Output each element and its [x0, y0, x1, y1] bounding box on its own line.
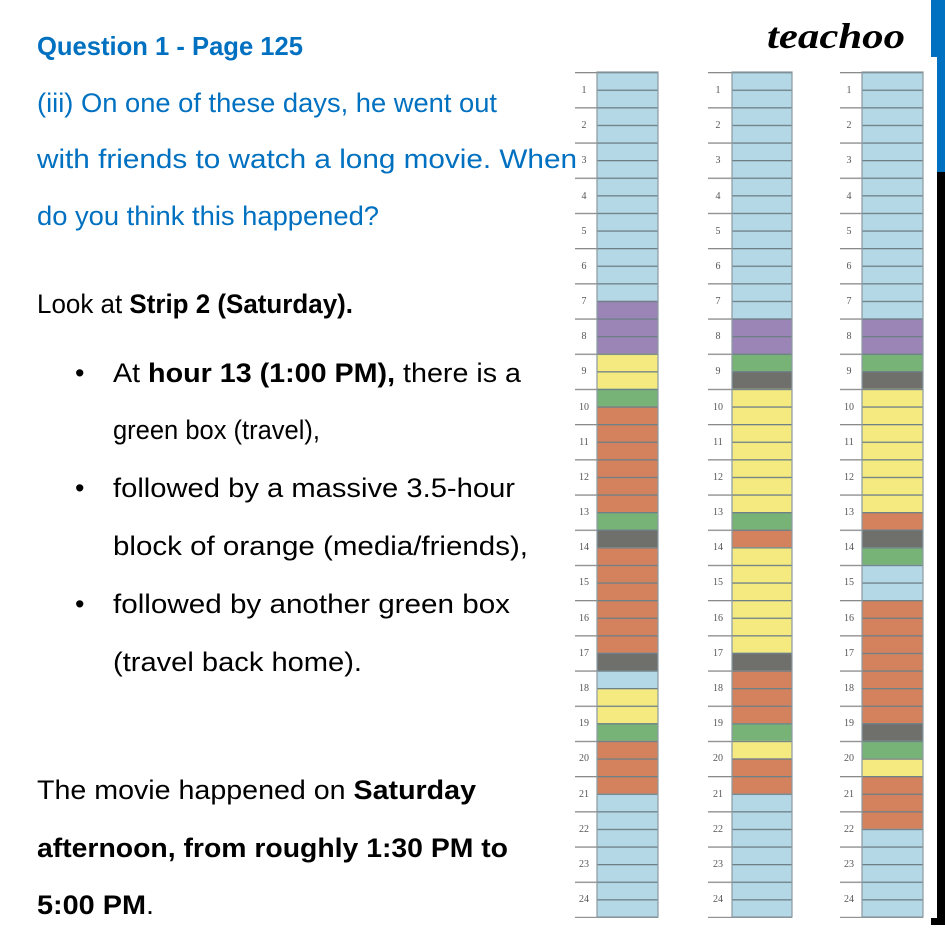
- bullet list: followed by another green box: [113, 589, 511, 619]
- hour labels: 2: [582, 120, 586, 131]
- hour labels: 24: [844, 894, 854, 905]
- hour labels: 13: [579, 507, 589, 518]
- hour labels: 13: [844, 507, 854, 518]
- bullet list: (travel back home).: [113, 647, 362, 677]
- hour labels: 7: [846, 296, 852, 307]
- question text: [36, 88, 577, 231]
- hour labels: 16: [713, 613, 723, 624]
- answer text: Look at Strip 2 (Saturday).: [37, 289, 353, 319]
- strip 1 (Friday): [575, 72, 658, 918]
- hour labels: 5: [582, 226, 586, 237]
- hour labels: 4: [582, 191, 586, 202]
- hour labels: 5: [846, 226, 852, 237]
- strip 3 (Sunday): [840, 72, 923, 918]
- hour labels: 12: [713, 472, 723, 483]
- hour labels: 3: [716, 155, 720, 166]
- hour labels: 23: [844, 859, 854, 870]
- hour labels: 7: [582, 296, 586, 307]
- hour labels: 10: [844, 402, 854, 413]
- hour labels: 22: [844, 824, 854, 835]
- hour labels: 1: [582, 85, 586, 96]
- answer text: The movie happened on Saturday: [37, 775, 476, 805]
- hour labels: 1: [846, 85, 852, 96]
- hour labels: 18: [579, 683, 589, 694]
- bullet list: followed by a massive 3.5-hour: [113, 473, 515, 503]
- strip 2 (Saturday): [708, 72, 792, 918]
- answer text: 5:00 PM .: [37, 890, 154, 920]
- hour labels: 4: [716, 191, 720, 202]
- hour labels: 18: [713, 683, 723, 694]
- hour labels: 21: [844, 789, 854, 800]
- hour labels: 6: [582, 261, 586, 272]
- hour labels: 20: [844, 753, 854, 764]
- logo: teachoo: teachoo: [767, 16, 905, 56]
- title: Question 1 - Page 125: [37, 31, 303, 61]
- hour labels: 17: [579, 648, 589, 659]
- answer text: [37, 289, 528, 920]
- hour labels: 23: [713, 859, 723, 870]
- hour labels: 18: [844, 683, 854, 694]
- hour labels: 22: [579, 824, 589, 835]
- hour labels: 8: [716, 331, 720, 342]
- hour labels: 19: [579, 718, 589, 729]
- hour labels: [579, 85, 854, 905]
- hour labels: 1: [716, 85, 720, 96]
- question text: do you think this happened?: [37, 201, 379, 231]
- hour labels: 2: [846, 120, 852, 131]
- bullet list: •: [75, 358, 84, 388]
- hour labels: 7: [716, 296, 720, 307]
- hour labels: 11: [713, 437, 723, 448]
- bullet list: •: [75, 589, 84, 619]
- hour labels: 22: [713, 824, 723, 835]
- bullet list: [75, 358, 528, 677]
- hour labels: 16: [579, 613, 589, 624]
- bullet list: At hour 13 (1:00 PM), there is a: [113, 358, 522, 388]
- hour labels: 21: [579, 789, 589, 800]
- hour labels: 10: [579, 402, 589, 413]
- hour labels: 3: [582, 155, 586, 166]
- hour labels: 9: [582, 366, 586, 377]
- bullet list: •: [75, 473, 84, 503]
- hour labels: 11: [844, 437, 854, 448]
- hour labels: 11: [579, 437, 589, 448]
- hour labels: 8: [846, 331, 852, 342]
- hour labels: 15: [579, 577, 589, 588]
- question text: with friends to watch a long movie. When: [36, 144, 577, 174]
- hour labels: 16: [844, 613, 854, 624]
- hour labels: 14: [579, 542, 589, 553]
- hour labels: 24: [579, 894, 589, 905]
- hour labels: 17: [713, 648, 723, 659]
- hour labels: 13: [713, 507, 723, 518]
- hour labels: 12: [579, 472, 589, 483]
- hour labels: 9: [846, 366, 852, 377]
- hour labels: 8: [582, 331, 586, 342]
- answer text: afternoon, from roughly 1:30 PM to: [37, 833, 508, 863]
- hour labels: 4: [846, 191, 852, 202]
- hour labels: 14: [844, 542, 854, 553]
- hour labels: 6: [716, 261, 720, 272]
- hour labels: 17: [844, 648, 854, 659]
- hour labels: 5: [716, 226, 720, 237]
- hour labels: 20: [579, 753, 589, 764]
- hour labels: 9: [716, 366, 720, 377]
- hour labels: 14: [713, 542, 723, 553]
- hour labels: 23: [579, 859, 589, 870]
- hour labels: 3: [846, 155, 852, 166]
- hour labels: 20: [713, 753, 723, 764]
- hour labels: 15: [844, 577, 854, 588]
- question text: (iii) On one of these days, he went out: [37, 88, 497, 118]
- hour labels: 19: [844, 718, 854, 729]
- hour labels: 12: [844, 472, 854, 483]
- hour labels: 24: [713, 894, 723, 905]
- decorative right edge bars: [931, 0, 945, 925]
- hour labels: 10: [713, 402, 723, 413]
- hour labels: 19: [713, 718, 723, 729]
- hour labels: 15: [713, 577, 723, 588]
- hour labels: 2: [716, 120, 720, 131]
- bullet list: green box (travel),: [113, 415, 320, 445]
- hour labels: 6: [846, 261, 852, 272]
- hour labels: 21: [713, 789, 723, 800]
- bullet list: block of orange (media/friends),: [113, 531, 528, 561]
